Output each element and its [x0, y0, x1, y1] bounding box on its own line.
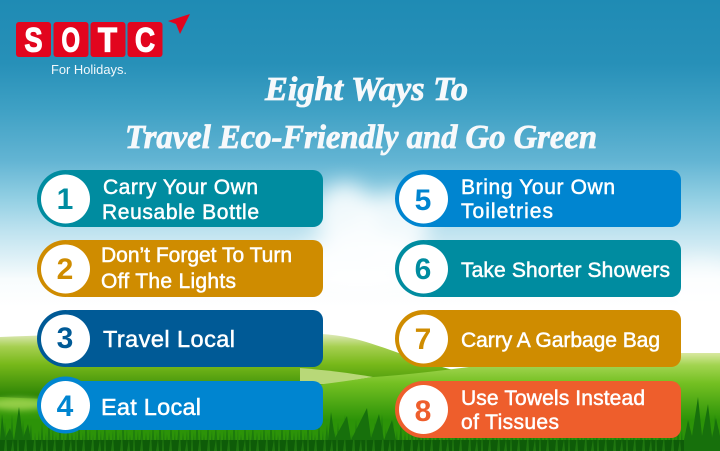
panel: item 8: of Tissues: [461, 411, 559, 434]
panel: item 4: [37, 376, 323, 434]
panel: item 6: [395, 240, 681, 297]
panel: item 5: Bring Your Own: [461, 176, 615, 199]
panel: item 3: [37, 310, 323, 367]
panel: item 8: Use Towels Instead: [461, 387, 645, 410]
title line 1: Eight Ways To: [264, 71, 468, 108]
title line 2: Travel Eco-Friendly and Go Green: [125, 119, 597, 156]
panel: item 7: [395, 310, 681, 367]
logo: SOTC For Holidays: [16, 14, 190, 77]
panel: item 4: Eat Local: [101, 394, 201, 420]
panel: item 5: Toiletries: [461, 200, 553, 223]
logo tile S: [16, 22, 51, 60]
panel: item 6: Take Shorter Showers: [461, 259, 670, 282]
panel: item 2: Don’t Forget To Turn: [101, 244, 292, 267]
panel: item 1: 1: [57, 183, 73, 216]
logo tile S: S: [24, 22, 42, 60]
title: [125, 71, 597, 156]
panel: item 5: [395, 170, 681, 227]
logo tagline: For Holidays.: [51, 62, 127, 77]
panel: item 5: 5: [415, 184, 431, 217]
grass: [0, 397, 720, 451]
clouds: [290, 183, 720, 320]
panel: item 1: [37, 170, 323, 227]
icon: red paper plane: [168, 14, 190, 34]
panel: item 8: 8: [415, 395, 431, 428]
panel: item 2: 2: [57, 253, 73, 286]
panel: item 1: Reusable Bottle: [102, 201, 259, 224]
panel: item 7: Carry A Garbage Bag: [461, 329, 660, 352]
panel: item 3: Travel Local: [103, 326, 235, 352]
logo tile O: O: [62, 22, 80, 60]
panel: item 2: [37, 240, 323, 297]
logo tile T: [90, 22, 126, 60]
logo tile C: C: [135, 22, 155, 60]
hills: [0, 331, 480, 400]
logo tile T: T: [98, 22, 117, 60]
panel: item 3: 3: [57, 322, 73, 355]
panel: item 2: Off The Lights: [101, 270, 236, 293]
panel: item 4: 4: [57, 390, 74, 423]
panel: item 1: Carry Your Own: [103, 176, 258, 199]
panel: item 6: 6: [415, 253, 431, 286]
panel: item 7: 7: [415, 323, 431, 356]
panel: item 8: [395, 381, 681, 438]
